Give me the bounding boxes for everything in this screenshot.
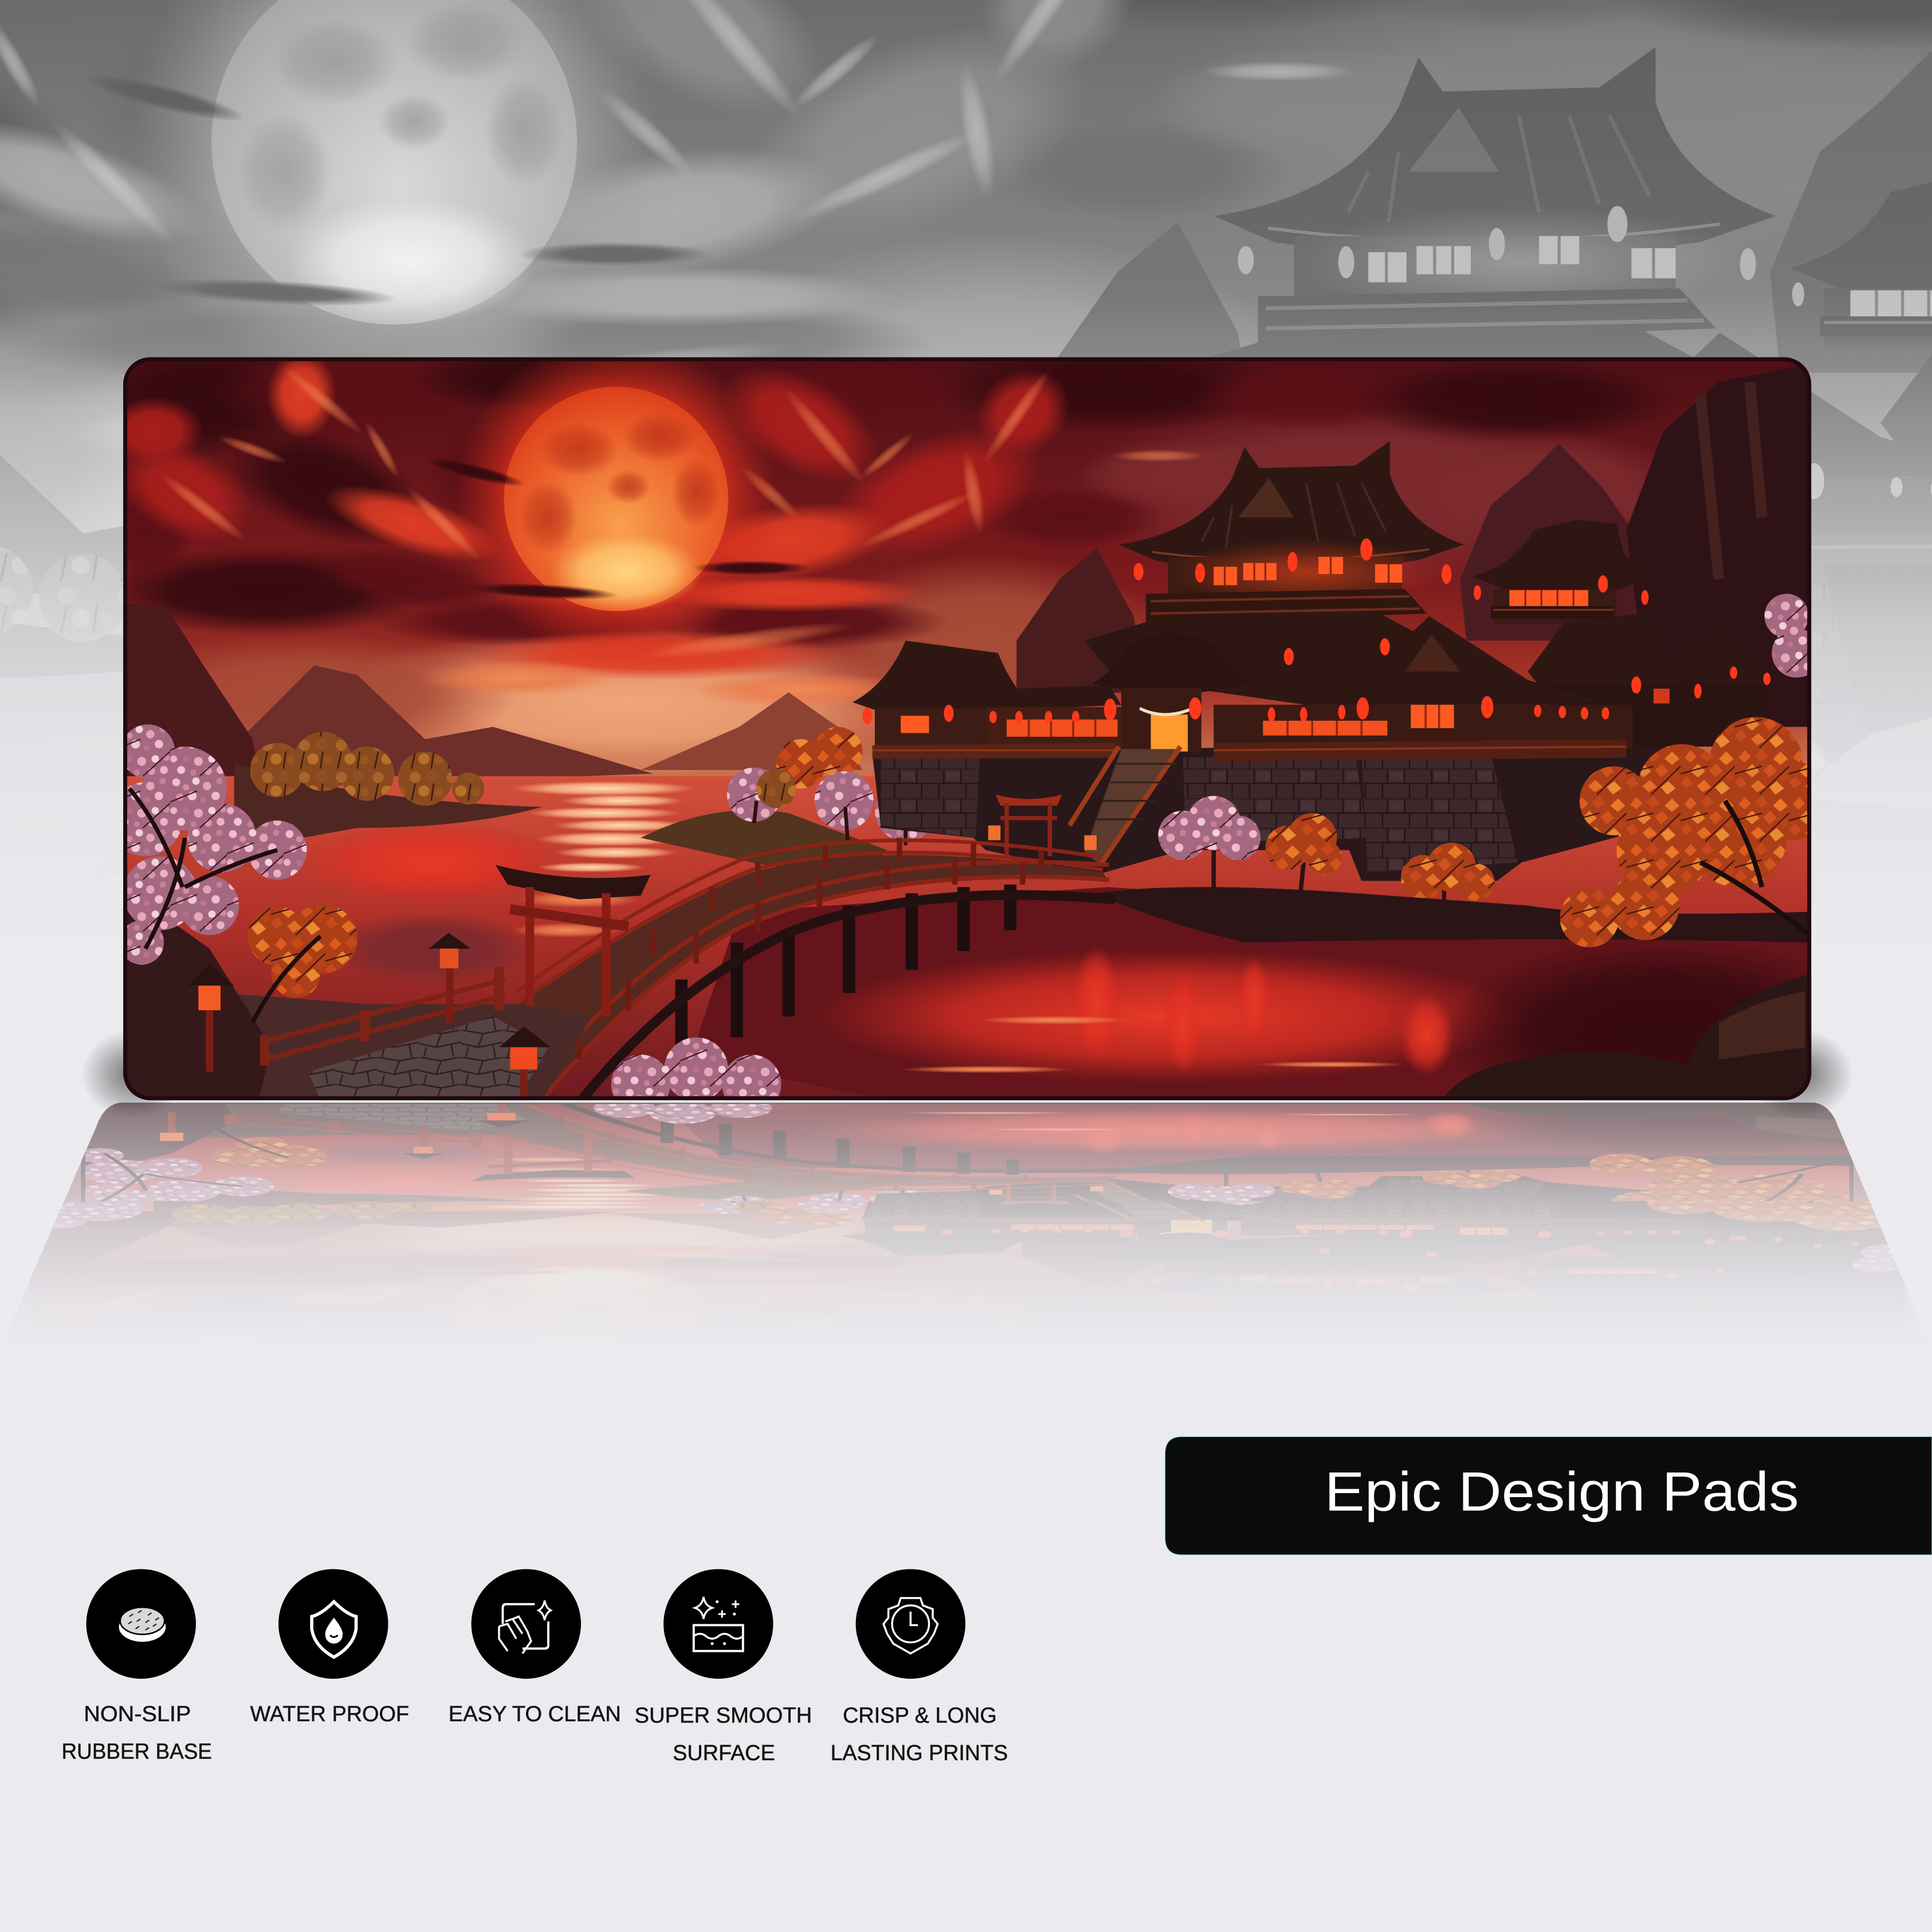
feature: water proof bbox=[250, 1569, 409, 1726]
blood moon bbox=[422, 336, 811, 662]
icon: hand wiping surface bbox=[472, 1569, 581, 1679]
moon reflection on water bbox=[296, 781, 696, 985]
pad stitched edge bbox=[125, 359, 1809, 1098]
sky bbox=[123, 358, 1811, 1100]
feature: non-slip rubber base bbox=[62, 1569, 212, 1764]
icon: shield with drop bbox=[278, 1569, 388, 1679]
foreground ground path bbox=[123, 887, 591, 1100]
brand banner bbox=[1165, 1436, 1932, 1555]
bridge deck bbox=[493, 855, 1109, 1100]
temple back tower bbox=[1472, 520, 1774, 747]
arched bridge bbox=[493, 838, 1115, 1100]
temple middle roof bbox=[1084, 614, 1515, 696]
label: WATER PROOF bbox=[250, 1702, 409, 1726]
distant mountains bbox=[123, 363, 1811, 813]
feature: easy to clean bbox=[449, 1569, 621, 1726]
clouds: red flames bbox=[101, 341, 1287, 707]
mouse pad with artwork bbox=[85, 358, 1849, 1114]
bridge rails bbox=[511, 838, 1109, 1097]
clouds: dark masses bbox=[80, 341, 1682, 649]
feature: crisp and long lasting prints bbox=[830, 1569, 1008, 1765]
label: RUBBER BASE bbox=[62, 1739, 212, 1764]
temple central gate bbox=[1091, 634, 1255, 752]
right river bank and trees bbox=[641, 727, 936, 881]
right shoreline bbox=[1097, 887, 1811, 943]
temple main upper roof and floor bbox=[1119, 441, 1464, 623]
mouse pad reflection bbox=[26, 1102, 1907, 1309]
label: NON-SLIP bbox=[84, 1702, 191, 1726]
left river bank and autumn trees bbox=[234, 732, 542, 850]
pad artwork scene bbox=[80, 336, 1885, 1133]
right pink blossoms bbox=[1765, 594, 1821, 678]
banner and feature row bbox=[62, 1436, 1932, 1765]
clouds: bright wisps bbox=[156, 362, 1205, 666]
hanging red lanterns bbox=[862, 539, 1770, 724]
dark foreground lake bbox=[690, 887, 1885, 1133]
bottom-right rocks bbox=[1442, 973, 1811, 1100]
small trees near temple bbox=[1158, 796, 1495, 906]
feature: super smooth surface bbox=[635, 1569, 812, 1765]
label: SUPER SMOOTH bbox=[635, 1703, 812, 1727]
large torii gate bbox=[496, 865, 650, 1016]
label: SURFACE bbox=[673, 1741, 775, 1765]
icon: sparkles over surface bbox=[663, 1569, 773, 1679]
label: EASY TO CLEAN bbox=[449, 1702, 621, 1726]
bottom cherry blossom bbox=[611, 1038, 781, 1114]
label: CRISP & LONG bbox=[843, 1703, 997, 1727]
background: enlarged grayscale artwork bbox=[0, 0, 1932, 811]
pad drop shadow bbox=[81, 1030, 1853, 1119]
sky glow bbox=[99, 394, 1701, 776]
temple left wing bbox=[853, 641, 1121, 759]
left fence bbox=[265, 967, 505, 1066]
stone lanterns bbox=[187, 933, 551, 1100]
left cherry blossom tree bbox=[108, 724, 358, 1023]
bridge underside arch bbox=[582, 895, 1115, 1100]
label: LASTING PRINTS bbox=[830, 1741, 1008, 1765]
lake surface bbox=[123, 776, 1811, 1100]
water reflections of lit temple bbox=[900, 945, 1454, 1077]
icon: clock badge bbox=[856, 1569, 965, 1679]
right orange maple tree bbox=[1560, 717, 1832, 948]
bridge pillars bbox=[681, 885, 1010, 1047]
temple right hall bbox=[1214, 616, 1632, 761]
icon: rubber disc bbox=[87, 1569, 196, 1679]
staircase and small torii bbox=[988, 747, 1180, 865]
stone foundation bbox=[873, 739, 1706, 881]
banner title: Epic Design Pads bbox=[1325, 1460, 1799, 1523]
